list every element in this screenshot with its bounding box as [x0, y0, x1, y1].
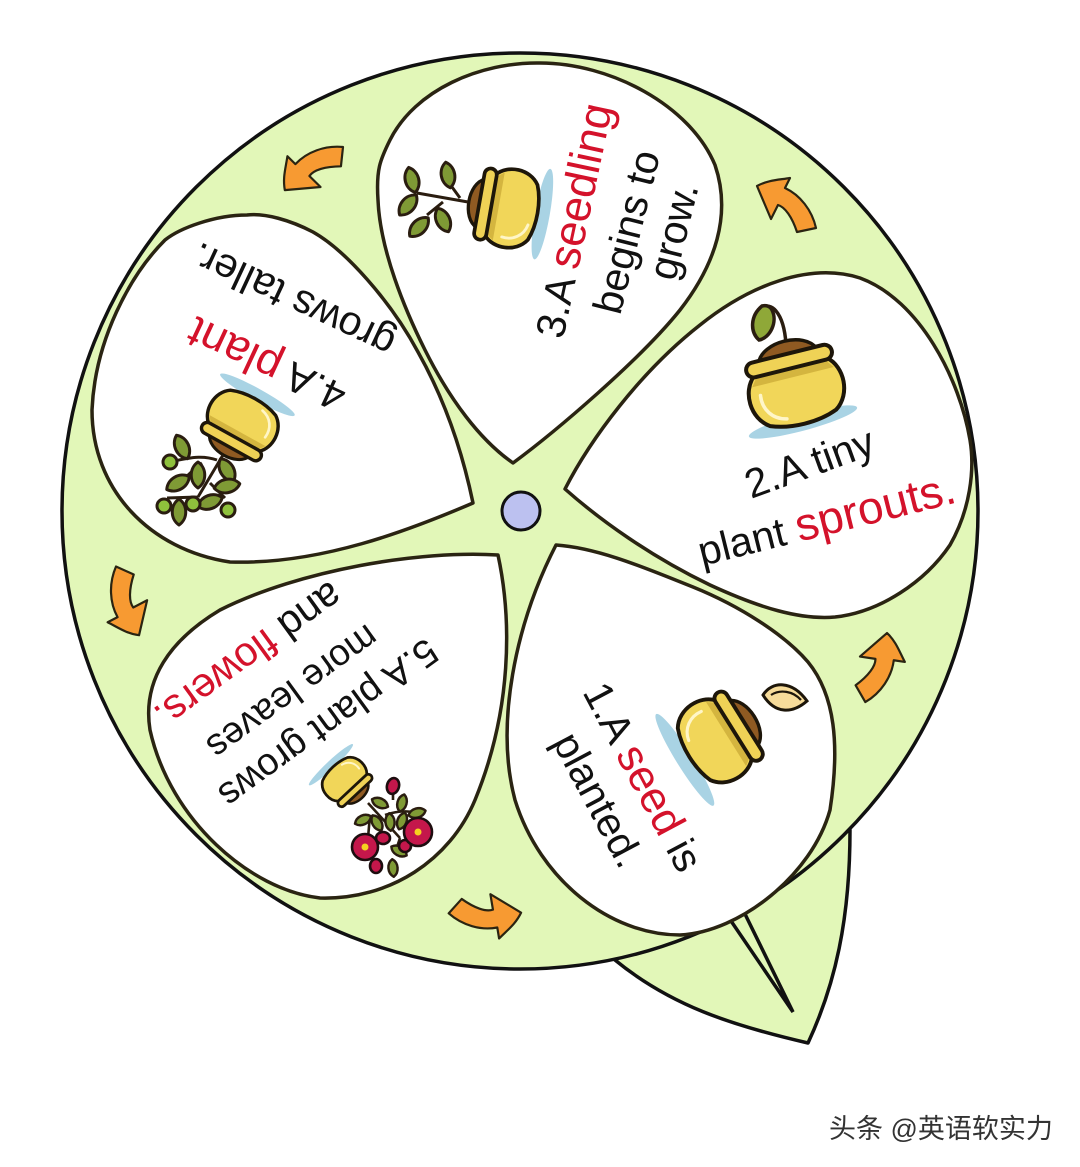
text: step 3: [523, 98, 707, 342]
text: step 3: begins to: [584, 146, 669, 318]
center pin: [502, 492, 540, 530]
arrow: petal 3 to 4: [277, 132, 347, 204]
text: step 5: more leaves: [199, 617, 386, 768]
arrow: petal 1 to 2: [843, 631, 913, 703]
petal 4: plant: [92, 215, 473, 562]
icon: sprouting pot: [737, 306, 859, 445]
icon: flowering pot: [306, 741, 432, 877]
arrow: petal 5 to 1: [446, 875, 526, 954]
text: step 4: 4.A plant: [179, 307, 353, 424]
icon: plant pot: [157, 369, 298, 525]
watermark: 头条 @英语软实力: [829, 1114, 1053, 1144]
icon: seed: [763, 685, 807, 710]
pointer: leaf-shaped spinner tab: [615, 830, 850, 1043]
text: step 1: planted.: [544, 725, 653, 875]
petal 1: seed: [507, 545, 835, 935]
text: step 4: grows taller.: [184, 233, 402, 368]
text: step 5: and flowers.: [146, 573, 352, 740]
text: step 3: grow.: [639, 178, 707, 284]
text: step 5: [146, 573, 445, 816]
petal 5: flowers: [149, 554, 507, 898]
petal 3: seedling: [378, 63, 722, 463]
text: step 3: 3.A seedling: [523, 98, 622, 342]
text: step 4: [179, 233, 402, 424]
text: step 1: [530, 674, 714, 903]
icon: seed pot: [649, 671, 783, 810]
wheel: light green disc: [62, 53, 978, 969]
arrow: petal 4 to 5: [87, 563, 166, 642]
arrow: petal 2 to 3: [757, 178, 816, 232]
text: step 1: 1.A seed is: [573, 674, 714, 880]
text: step 2: 2.A tiny: [738, 418, 881, 507]
text: step 2: plant sprouts.: [692, 461, 961, 576]
text: step 5: 5.A plant grows: [211, 630, 445, 816]
icon: seedling pot: [394, 156, 558, 261]
petal 2: sprout: [565, 273, 972, 617]
